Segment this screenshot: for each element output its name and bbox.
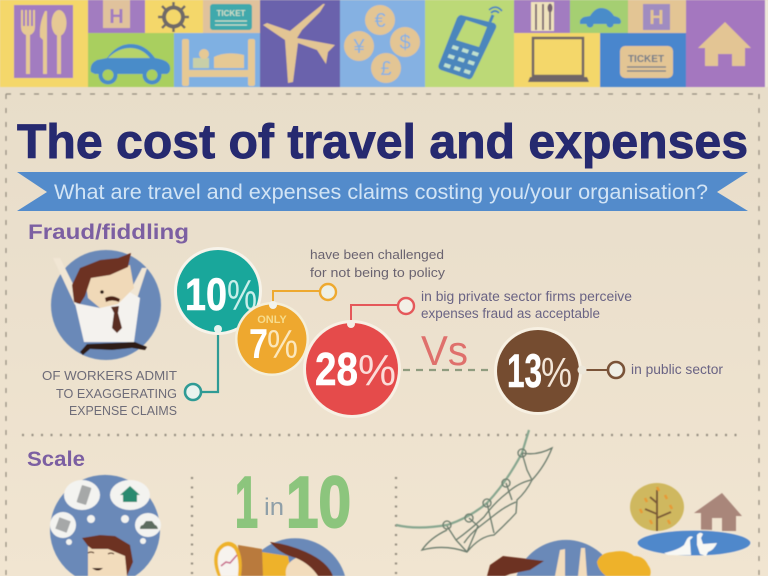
thought cloud: car xyxy=(135,513,161,537)
tile: hotel sign xyxy=(88,0,145,33)
illustration: net and rope xyxy=(396,430,552,552)
stat circle: 7% xyxy=(235,301,309,376)
pond xyxy=(637,530,751,556)
stat text: workers admit: EXPENSE CLAIMS xyxy=(69,403,177,418)
tile: currency coins: € xyxy=(374,10,386,32)
stat circle: 10%: % xyxy=(227,272,257,320)
illustration: man with telescope xyxy=(214,538,345,576)
thought cloud: phone xyxy=(64,480,100,510)
tile: currency coins: ¥ xyxy=(352,36,365,58)
tile: currency coins: £ xyxy=(380,58,392,80)
subtitle ribbon: What are travel and expenses claims costing you/your organisation? xyxy=(54,181,708,204)
tile: bed xyxy=(174,33,260,87)
stat circle: 13%: 13 xyxy=(507,344,542,397)
illustration: celebrating man xyxy=(51,250,161,360)
tile: small hotel sign xyxy=(628,0,686,33)
tile: mobile phone xyxy=(425,0,514,87)
connector: 28% xyxy=(351,298,414,323)
statistic: 1 in 10: 1 xyxy=(235,463,258,543)
illustration: tree, house and geese xyxy=(630,483,751,556)
tile: blue ticket: TICKET xyxy=(628,54,664,65)
label: Vs: Vs xyxy=(421,327,468,374)
stat text: public sector: in public sector xyxy=(631,362,724,377)
comparison dashed line xyxy=(403,369,492,371)
tile: hotel sign: H xyxy=(109,6,124,28)
house xyxy=(694,493,742,531)
top icon strip xyxy=(0,0,765,87)
tile: car on green xyxy=(88,33,174,87)
tile: sun xyxy=(145,0,203,33)
stat text: challenged: have been challenged xyxy=(310,247,444,262)
stat text: challenged: for not being to policy xyxy=(310,265,446,280)
geese xyxy=(664,533,717,556)
tile: currency coins: $ xyxy=(399,32,411,54)
subtitle ribbon xyxy=(17,172,748,211)
stat text: workers admit xyxy=(42,368,177,418)
tile: house xyxy=(686,0,765,87)
statistic: 1 in 10: in xyxy=(264,494,284,521)
tile: small car xyxy=(570,0,628,33)
stat text: private sector: in big private sector firms perceive xyxy=(421,289,632,304)
stat text: workers admit: OF WORKERS ADMIT xyxy=(42,368,177,383)
section heading: fraud: Fraud/fiddling xyxy=(28,221,189,244)
stat circle: 7%: ONLY xyxy=(257,314,287,326)
stat circle: 28%: % xyxy=(358,346,396,395)
section heading: scale: Scale xyxy=(27,448,85,471)
stat text: challenged xyxy=(310,247,446,280)
tile: blue ticket xyxy=(600,33,686,87)
stat circle: 7%: 7 xyxy=(249,320,268,367)
tile: airplane xyxy=(260,0,340,87)
tree xyxy=(630,483,684,531)
tile: small hotel sign: H xyxy=(649,7,664,29)
thought cloud: house xyxy=(110,480,150,510)
stat circle: 7%: % xyxy=(267,323,298,367)
stat circle: 13% xyxy=(494,327,586,415)
tile: currency coins xyxy=(340,0,425,87)
tile: laptop xyxy=(514,33,600,87)
thought cloud: card xyxy=(50,512,76,538)
stat circle: 28%: 28 xyxy=(315,343,358,395)
statistic: 1 in 10: 10 xyxy=(286,463,351,543)
stat circle: 10%: 10 xyxy=(185,269,227,320)
statistic: 1 in 10 xyxy=(235,463,351,543)
illustration: figure with yellow cloud xyxy=(487,540,651,576)
tile: teal ticket: TICKET xyxy=(217,9,246,18)
stat circle: 28% xyxy=(303,320,401,418)
stat text: workers admit: TO EXAGGERATING xyxy=(56,386,177,401)
stat text: private sector xyxy=(421,289,632,321)
stat circle: 10% xyxy=(174,247,262,335)
stat text: private sector: expenses fraud as acceptable xyxy=(421,306,600,321)
stat circle: 13%: % xyxy=(541,349,572,396)
illustration: daydreaming man xyxy=(50,475,161,576)
tile: teal ticket xyxy=(203,0,260,33)
title: The cost of travel and expenses xyxy=(17,116,748,169)
tile: small cutlery xyxy=(514,0,570,33)
connector: 7% xyxy=(273,284,336,305)
stat: 10% connector xyxy=(185,330,218,400)
connector: 13% xyxy=(582,362,624,378)
tile: cutlery on yellow xyxy=(0,0,88,87)
